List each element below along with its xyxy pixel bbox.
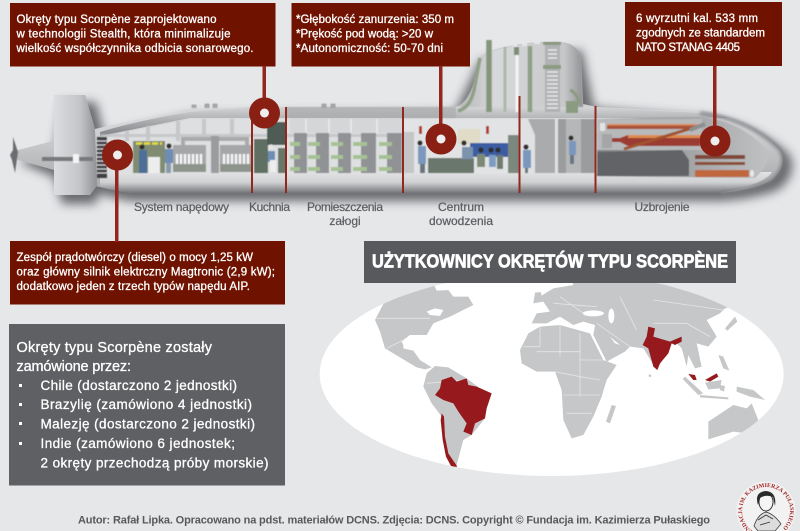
list items: Chile (dostarczono 2 jednostki)	[40, 378, 237, 393]
callout: stealth: w technologii Stealth, która minimalizuje	[16, 28, 230, 40]
callout: performance: *Prękość pod wodą: >20 w	[296, 28, 434, 40]
list items: Indie (zamówiono 6 jednostek;	[40, 436, 235, 451]
list items: 2 okręty przechodzą próby morskie)	[40, 456, 268, 470]
cook	[268, 144, 276, 172]
callout: stealth: Okręty typu Scorpène zaprojektowano	[16, 14, 216, 26]
callout: torpedo tubes	[625, 2, 782, 66]
section label: command centre: Centrum	[438, 200, 484, 214]
interior background	[100, 119, 600, 173]
exhaust grille	[97, 137, 107, 178]
panel: orders list	[9, 324, 285, 486]
list items: Brazylię (zamówiono 4 jednostki)	[40, 397, 252, 412]
list heading: zamówione przez:	[16, 359, 131, 375]
marker: stealth	[249, 66, 280, 128]
callout: torpedo tubes: 6 wyrzutni kal. 533 mm	[636, 13, 758, 25]
callout: performance: *Głębokość zanurzenia: 350 m	[296, 14, 454, 26]
marker: performance	[426, 66, 456, 154]
footer credits: Autor: Rafał Lipka. Opracowano na pdst. materiałów DCNS. Zdjęcia: DCNS. Copyright © Fundacja im. Kazimierza Pułaskiego	[78, 514, 710, 526]
list heading	[16, 340, 213, 375]
list items	[19, 378, 268, 470]
bow rim	[700, 113, 783, 193]
access section	[519, 119, 595, 173]
diesel engine 2	[220, 145, 252, 172]
map title bar: UŻYTKOWNICY OKRĘTÓW TYPU SCORPÈNE	[372, 250, 728, 272]
diesel engine 1	[173, 145, 206, 172]
world map	[320, 267, 784, 476]
callout: performance	[292, 3, 470, 66]
propeller	[10, 137, 18, 173]
section label: propulsion: System napędowy	[134, 200, 229, 214]
map title bar	[364, 241, 736, 283]
shaft	[42, 157, 93, 161]
pipes above engines	[183, 139, 247, 145]
section label: command centre: dowodzenia	[429, 214, 493, 228]
callout: stealth	[10, 3, 276, 66]
country borders	[377, 297, 723, 413]
section label: galley: Kuchnia	[249, 200, 290, 214]
list heading: Okręty typu Scorpène zostały	[16, 340, 213, 356]
callout: stealth: wielkość współczynnika odbicia sonarowego.	[16, 43, 254, 55]
section dividers	[252, 96, 596, 193]
marker: torpedo tubes	[700, 66, 730, 156]
command centre	[403, 119, 519, 173]
crew bunks	[290, 133, 402, 173]
section label: armament: Uzbrojenie	[634, 200, 690, 214]
section label: crew quarters: Pomieszczenia	[307, 200, 383, 214]
list items: Malezję (dostarczono 2 jednostki)	[40, 416, 255, 432]
engine control panel	[133, 141, 165, 173]
galley units	[254, 122, 286, 173]
ordering countries	[435, 327, 718, 467]
callout: torpedo tubes: zgodnych ze standardem	[636, 28, 765, 40]
callout: propulsion	[10, 241, 285, 304]
submarine cutaway illustration	[10, 40, 792, 204]
callout: propulsion: oraz główny silnik elektrczny Magtronic (2,9 kW);	[16, 266, 275, 278]
section label: crew quarters: załogi	[329, 214, 361, 228]
callout: propulsion: dodatkowo jeden z trzech typów napędu AIP.	[16, 281, 250, 293]
callout: performance: *Autonomiczność: 50-70 dni	[296, 43, 443, 55]
marker: propulsion	[102, 140, 133, 242]
continents	[375, 283, 765, 466]
inland seas	[402, 308, 620, 348]
callout: propulsion: Zespół prądotwórczy (diesel) o mocy 1,25 kW	[16, 252, 253, 264]
callout: torpedo tubes: NATO STANAG 4405	[636, 42, 740, 54]
crew member	[165, 143, 173, 173]
weapons bay	[597, 117, 768, 178]
portrait	[754, 491, 781, 531]
sail equipment	[458, 40, 583, 113]
central column	[211, 136, 219, 173]
